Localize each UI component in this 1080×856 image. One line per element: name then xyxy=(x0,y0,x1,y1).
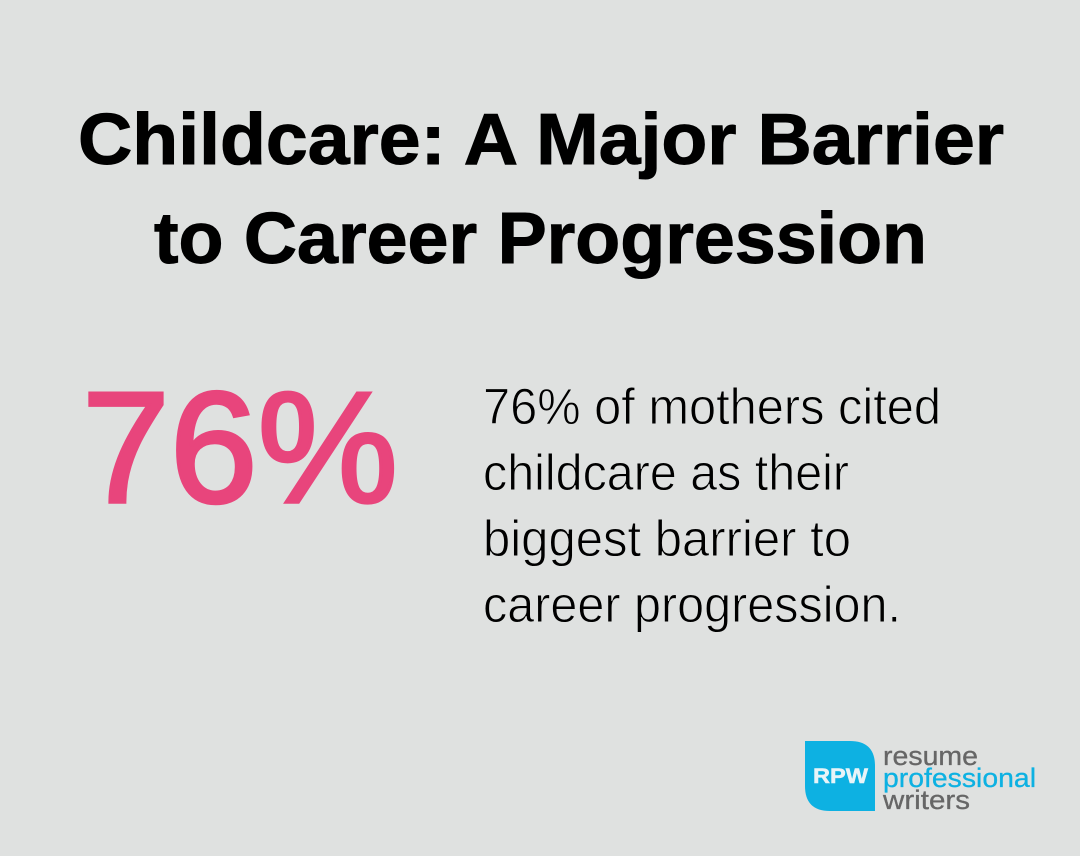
description text: biggest barrier to xyxy=(483,510,851,567)
title: to Career Progression xyxy=(154,199,927,279)
logo badge xyxy=(805,741,875,811)
title xyxy=(78,100,1004,279)
description text: career progression. xyxy=(483,576,901,633)
logo wordmark xyxy=(882,741,1036,815)
title: Childcare: A Major Barrier xyxy=(78,100,1004,180)
description text: 76% of mothers cited xyxy=(483,378,941,435)
big statistic: 76% xyxy=(82,360,398,536)
logo wordmark: professional xyxy=(883,763,1036,793)
logo: RPW xyxy=(805,741,1036,815)
description text: childcare as their xyxy=(483,444,849,501)
logo wordmark: writers xyxy=(882,785,970,815)
logo badge: RPW xyxy=(813,765,868,788)
logo wordmark: resume xyxy=(883,741,978,771)
description text xyxy=(483,378,941,633)
